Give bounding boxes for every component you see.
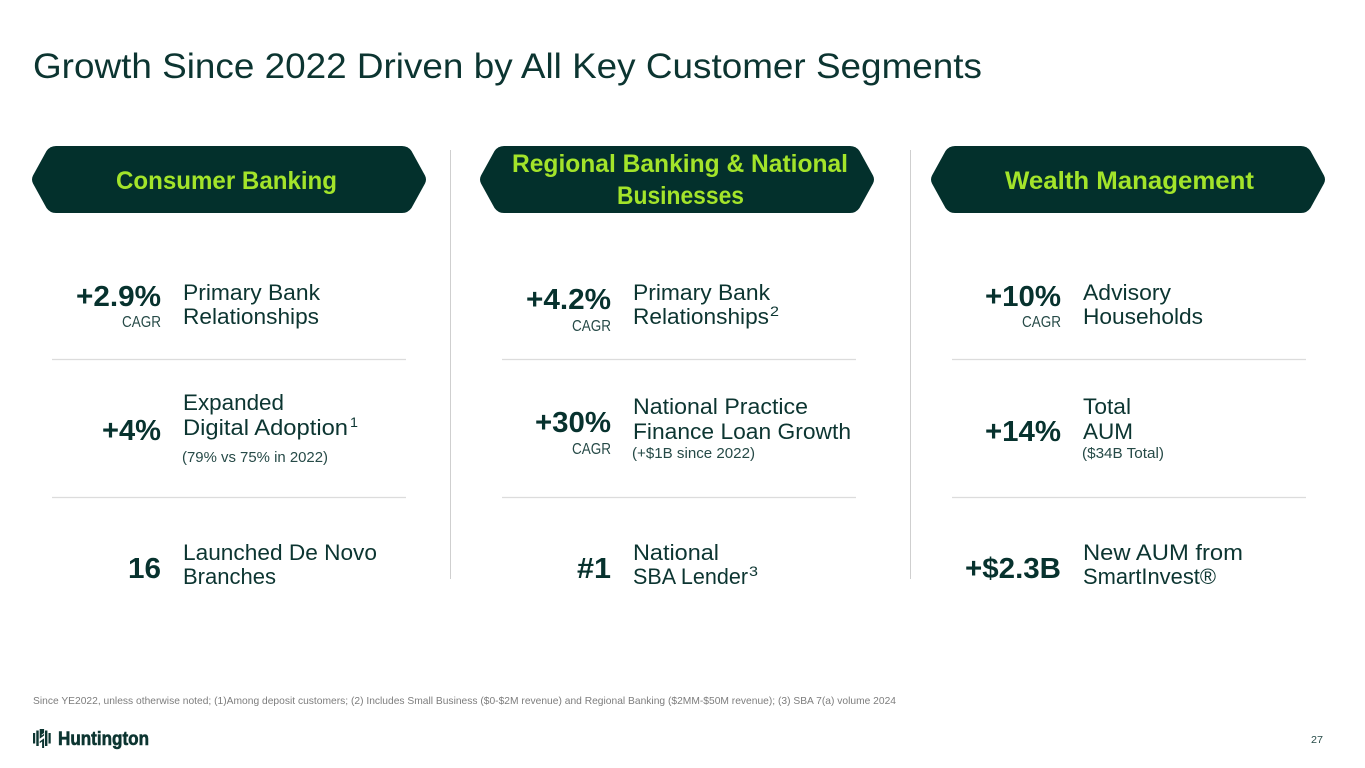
metric: expanded digital adoption: 1 bbox=[350, 414, 358, 430]
metric: national sba lender bbox=[577, 540, 758, 589]
metric: national practice finance loan growth: (+$1B since 2022) bbox=[632, 446, 755, 462]
metric: de novo branches: 16 bbox=[128, 553, 161, 585]
metric: primary bank relationships: 2 bbox=[770, 303, 779, 319]
metric: primary bank relationships: +2.9% bbox=[76, 281, 161, 313]
logo: huntington: Huntington bbox=[58, 729, 149, 750]
metric: primary bank relationships: Relationships bbox=[633, 304, 769, 329]
metric: primary bank relationships: CAGR bbox=[572, 318, 611, 335]
metric: national sba lender: SBA Lender bbox=[633, 564, 748, 589]
metric: advisory households: Households bbox=[1083, 304, 1203, 329]
metric: total aum: +14% bbox=[985, 416, 1061, 448]
metric: new aum from smartinvest: +$2.3B bbox=[965, 553, 1061, 585]
icon: huntington mark bbox=[33, 729, 51, 748]
metric: primary bank relationships: CAGR bbox=[122, 314, 161, 331]
heading: regional banking and national businesses bbox=[480, 146, 874, 213]
metric: national practice finance loan growth: CAGR bbox=[572, 441, 611, 458]
panel: wealth management bbox=[931, 146, 1325, 589]
page number: 27 bbox=[1311, 734, 1323, 746]
heading: wealth management: Wealth Management bbox=[1005, 167, 1255, 195]
metric: de novo branches: Launched De Novo bbox=[183, 540, 377, 565]
metric: primary bank relationships: Primary Bank bbox=[183, 280, 321, 305]
heading: consumer banking: Consumer Banking bbox=[116, 167, 337, 195]
panel: consumer banking bbox=[32, 146, 426, 589]
metric: primary bank relationships: Relationships bbox=[183, 304, 319, 329]
metric: national sba lender: 3 bbox=[749, 563, 758, 579]
metric: primary bank relationships bbox=[76, 280, 321, 331]
metric: primary bank relationships bbox=[526, 280, 779, 335]
metric: expanded digital adoption: +4% bbox=[102, 415, 161, 447]
metric: total aum bbox=[985, 394, 1164, 462]
metric: expanded digital adoption: Expanded bbox=[183, 390, 284, 415]
metric: national practice finance loan growth bbox=[535, 394, 851, 462]
heading: consumer banking bbox=[32, 146, 426, 213]
metric: national sba lender: #1 bbox=[577, 553, 611, 585]
metric: primary bank relationships: +4.2% bbox=[526, 284, 611, 316]
metric: advisory households bbox=[985, 280, 1203, 331]
metric: national practice finance loan growth: Finance Loan Growth bbox=[633, 419, 851, 444]
heading: wealth management bbox=[931, 146, 1325, 213]
heading: regional banking and national businesses: Regional Banking & National bbox=[512, 150, 848, 178]
footnote: Since YE2022, unless otherwise noted; (1)Among deposit customers; (2) Includes Small Business ($0-$2M revenue) and Regional Banking ($2MM-$50M revenue); (3) SBA 7(a) volume 2024 bbox=[33, 695, 896, 707]
metric: total aum: Total bbox=[1083, 394, 1131, 419]
metric: national practice finance loan growth: +30% bbox=[535, 407, 611, 439]
metric: primary bank relationships: Primary Bank bbox=[633, 280, 771, 305]
metric: national sba lender: National bbox=[633, 540, 719, 565]
metric: new aum from smartinvest: SmartInvest® bbox=[1083, 564, 1216, 589]
panel: regional banking and national businesses bbox=[480, 146, 874, 589]
heading: regional banking and national businesses: Businesses bbox=[617, 182, 744, 210]
metric: expanded digital adoption: (79% vs 75% in 2022) bbox=[182, 450, 328, 466]
metric: new aum from smartinvest: New AUM from bbox=[1083, 540, 1243, 565]
metric: de novo branches bbox=[128, 540, 377, 589]
metric: advisory households: CAGR bbox=[1022, 314, 1061, 331]
metric: advisory households: +10% bbox=[985, 281, 1061, 313]
title: Growth Since 2022 Driven by All Key Customer Segments bbox=[33, 46, 982, 86]
metric: national practice finance loan growth: National Practice bbox=[633, 394, 808, 419]
metric: expanded digital adoption: Digital Adoption bbox=[183, 415, 348, 440]
metric: total aum: ($34B Total) bbox=[1082, 446, 1164, 462]
metric: expanded digital adoption bbox=[102, 390, 358, 466]
metric: new aum from smartinvest bbox=[965, 540, 1243, 589]
metric: de novo branches: Branches bbox=[183, 564, 276, 589]
metric: advisory households: Advisory bbox=[1083, 280, 1172, 305]
metric: total aum: AUM bbox=[1083, 419, 1133, 444]
